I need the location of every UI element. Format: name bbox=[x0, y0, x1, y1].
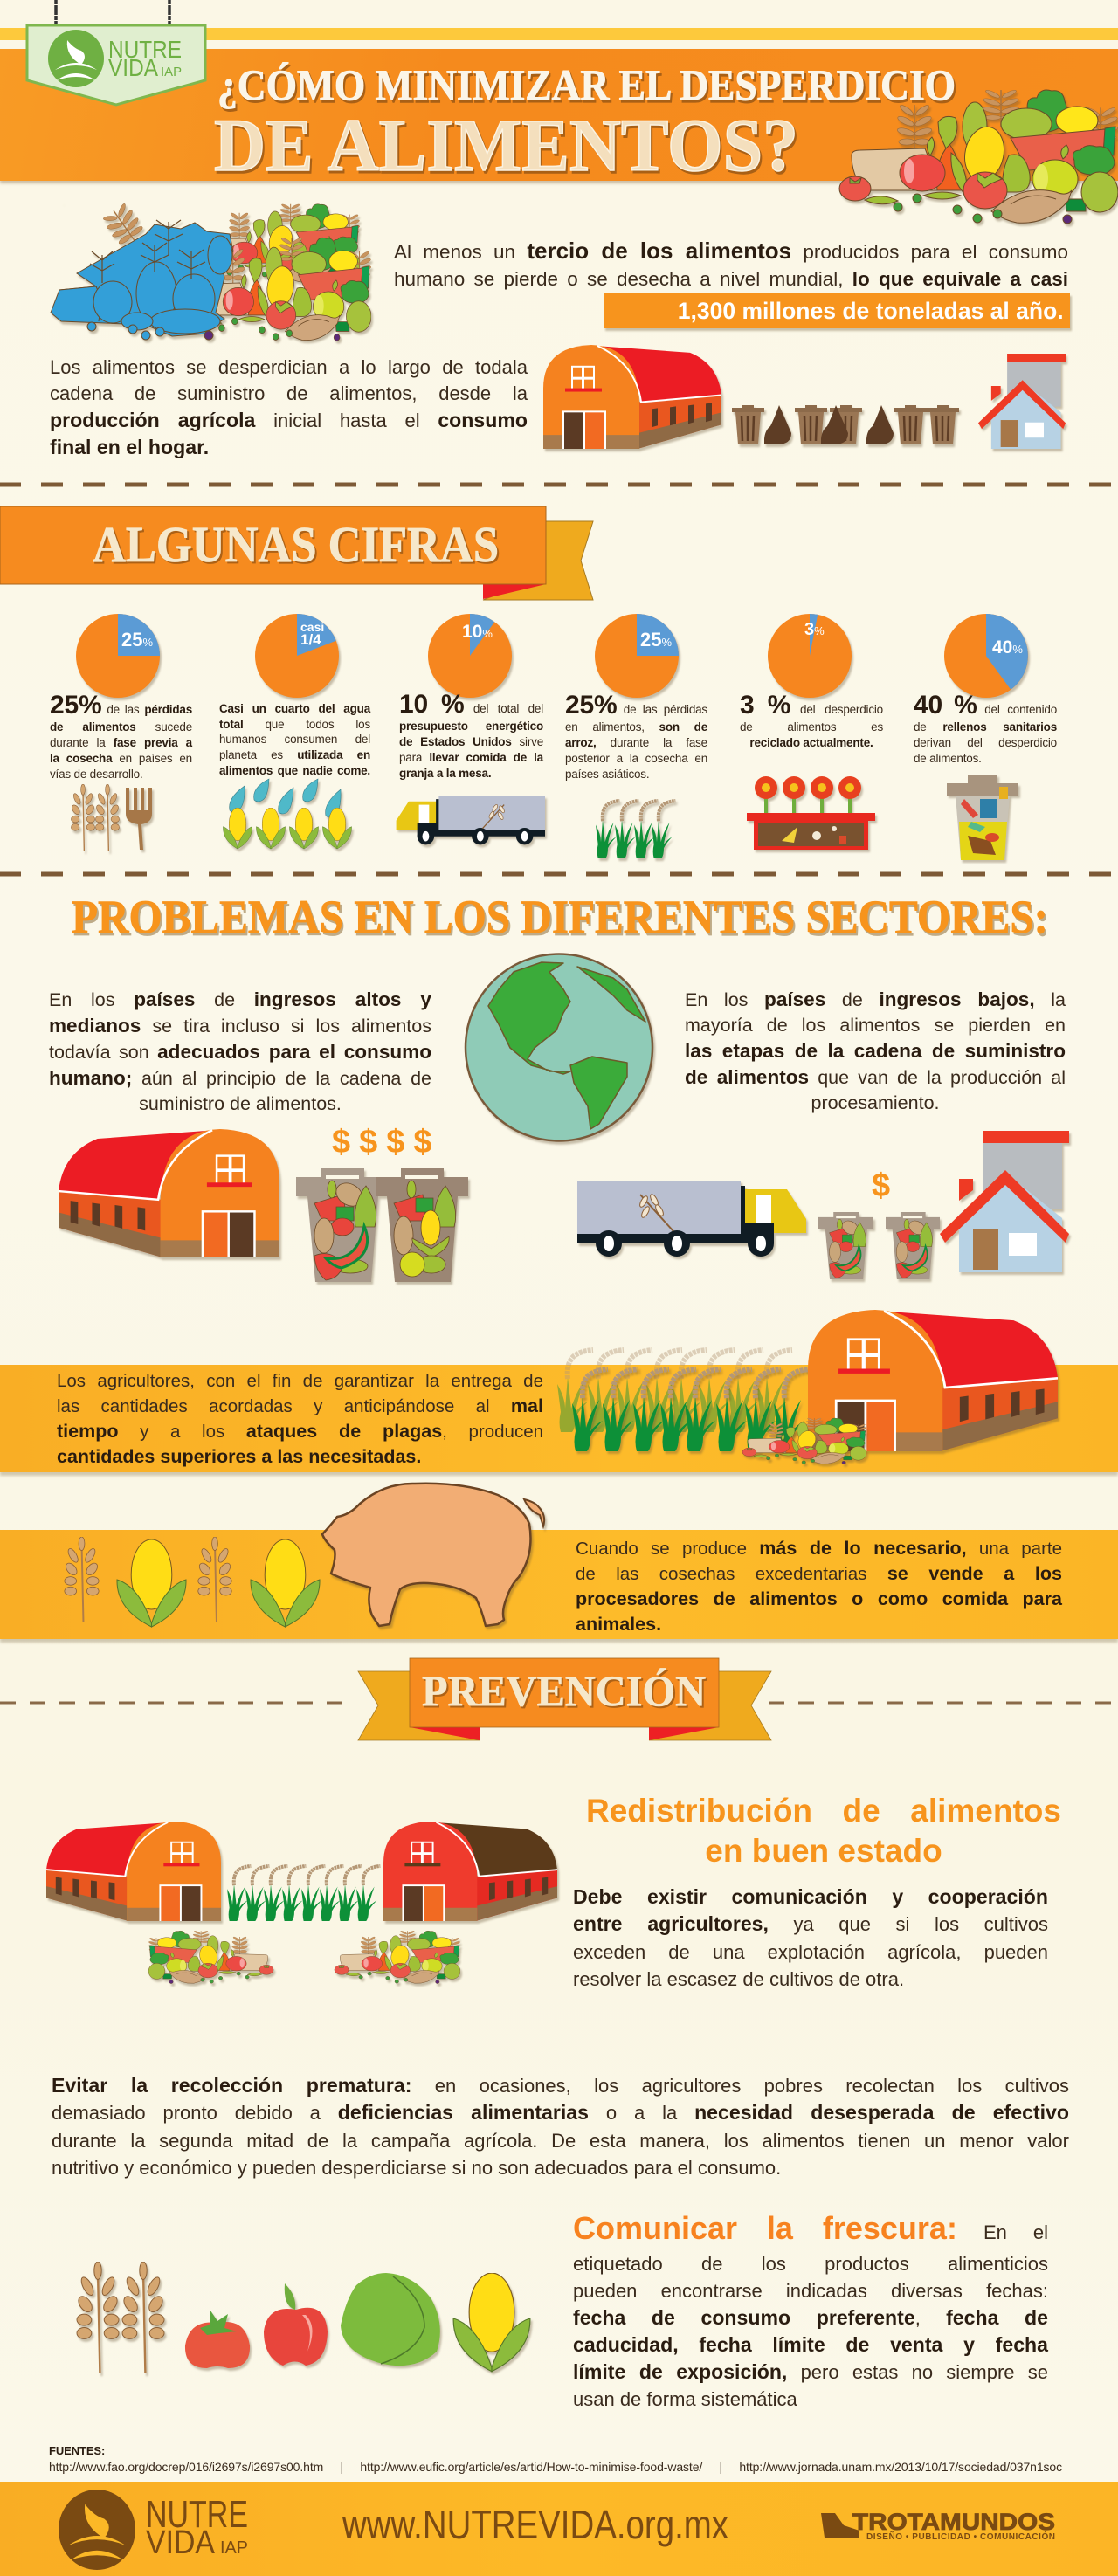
pie chart: 10% bbox=[428, 614, 514, 702]
text: a quarter of the water bbox=[219, 702, 370, 777]
icon: wheat and fork bbox=[71, 784, 155, 854]
text: high income countries: todavía son adecuados para el consumo bbox=[49, 1041, 431, 1063]
trotamundos logo: DISEÑO • PUBLICIDAD • COMUNICACIÓN bbox=[866, 2531, 1055, 2542]
band: farmers bbox=[0, 1365, 1118, 1472]
text: low income countries: procesamiento. bbox=[811, 1092, 940, 1113]
text: a quarter of the water: Casi un cuarto del agua bbox=[219, 702, 370, 715]
icon: small food pile bbox=[742, 1417, 866, 1464]
text: farmers overproduce: Los agricultores, con el fin de garantizar la entrega de bbox=[57, 1371, 543, 1391]
pie chart: 25%: 25% bbox=[121, 629, 153, 651]
text: 40% landfill: de rellenos sanitarios bbox=[914, 720, 1057, 734]
icon: dollar sign: $ bbox=[872, 1167, 890, 1204]
text: 25% rice: 25% de las pérdidas bbox=[565, 691, 707, 720]
icon: corn bbox=[452, 2273, 531, 2373]
text: low income countries: de alimentos que van de la producción al bbox=[685, 1066, 1066, 1088]
footer logo: NUTRE bbox=[146, 2493, 248, 2536]
text: a quarter of the water: alimentos que nadie come. bbox=[219, 764, 370, 777]
text: low income countries bbox=[685, 988, 1066, 1113]
text: 25% of losses: durante la fase previa a bbox=[50, 736, 192, 749]
text: 3% recycled: reciclado actualmente. bbox=[749, 736, 873, 749]
text: high income countries bbox=[49, 988, 431, 1114]
ribbon heading: Prevención bbox=[354, 1655, 777, 1746]
icon: orange barn bbox=[46, 1822, 221, 1921]
pie chart: almost 1/4 bbox=[255, 614, 342, 702]
text: 10% energy: de Estados Unidos sirve bbox=[399, 735, 543, 748]
text: farmers overproduce: cantidades superiores a las necesitadas. bbox=[57, 1446, 421, 1467]
pie chart: 10%: 10% bbox=[462, 622, 493, 642]
text: 40% landfill: derivan del desperdicio bbox=[914, 736, 1057, 749]
pie chart: 3%: 3% bbox=[804, 620, 825, 639]
title: DE ALIMENTOS? bbox=[214, 103, 798, 187]
text: supply chain bbox=[50, 356, 528, 458]
stat card: recycled bbox=[740, 614, 883, 854]
text: surplus sold: Cuando se produce más de lo necesario, una parte bbox=[576, 1538, 1062, 1559]
icon: red barn bbox=[383, 1822, 557, 1921]
stat card: water bbox=[219, 614, 370, 852]
icon: dollar signs: $$$$ bbox=[332, 1124, 441, 1161]
illustration: food pile, header right bbox=[838, 89, 1118, 227]
icon: pig bbox=[319, 1480, 550, 1629]
callout: 1,300 million tons bbox=[604, 293, 1070, 328]
text: farmers overproduce: las cantidades acordadas y anticipándose al mal bbox=[57, 1395, 543, 1416]
text: one third of food lost bbox=[394, 238, 1068, 290]
text: communicate freshness: límite de exposición, pero estas no siempre se bbox=[573, 2360, 1048, 2383]
text: 10% energy: 10 % del total del bbox=[399, 690, 543, 719]
text: low income countries: las etapas de la cadena de suministro bbox=[685, 1040, 1066, 1062]
text: communication: exceden de una explotación agrícola, pueden bbox=[573, 1941, 1048, 1963]
text: 25% of losses: de alimentos sucede bbox=[50, 720, 192, 734]
text: 25% of losses: la cosecha en países en bbox=[50, 752, 192, 765]
icon: globe bbox=[465, 953, 657, 1146]
title: ¿CÓMO MINIMIZAR EL DESPERDICIO bbox=[217, 60, 956, 109]
text: 3% recycled: 3 % del desperdicio bbox=[740, 691, 883, 720]
icon: house, low income bbox=[940, 1131, 1069, 1272]
text: 25% rice: arroz, durante la fase bbox=[565, 736, 707, 749]
text: 25% of losses: 25% de las pérdidas bbox=[50, 691, 192, 720]
text: supply chain: producción agrícola inicial hasta el consumo bbox=[50, 409, 528, 431]
pie chart: 25%: 25% bbox=[640, 629, 672, 651]
text: communication: Debe existir comunicación y cooperación bbox=[573, 1885, 1048, 1908]
text: 25% rice: países asiáticos. bbox=[565, 768, 649, 781]
hanging logo tag: NUTRE bbox=[108, 36, 182, 63]
text: 25% rice: en alimentos, son de bbox=[565, 720, 707, 734]
text: communicate freshness: usan de forma sistemática bbox=[573, 2388, 797, 2410]
icon: food bins, high income bbox=[296, 1168, 468, 1282]
text: 25% rice bbox=[565, 691, 707, 781]
sources: FUENTES: bbox=[49, 2444, 105, 2457]
text: 10% energy: granja a la mesa. bbox=[399, 767, 491, 780]
text: a quarter of the water: total que todos los bbox=[219, 718, 370, 731]
text: 10% energy: para llevar comida de la bbox=[399, 751, 543, 764]
band: animal feed bbox=[0, 1530, 1118, 1639]
text: supply chain: cadena de suministro de alimentos, desde la bbox=[50, 382, 528, 404]
icon: rice between barns bbox=[225, 1864, 384, 1921]
icon: truck bbox=[397, 796, 549, 849]
text: communication bbox=[573, 1884, 1048, 1993]
pie chart: 40%: 40% bbox=[992, 637, 1023, 658]
text: premature harvest: demasiado pronto debido a deficiencias alimentarias o a la necesidad desesperada de efectivo bbox=[52, 2101, 1069, 2124]
footer logo: IAP bbox=[220, 2538, 248, 2558]
text: a quarter of the water: humanos consumen del bbox=[219, 733, 370, 746]
icon: trash bins and bags row bbox=[732, 405, 962, 448]
icon: food bins, low income bbox=[818, 1212, 940, 1279]
text: communication: resolver la escasez de cultivos de otra. bbox=[573, 1968, 904, 1990]
ribbon heading: Prevención: PREVENCIÓN bbox=[422, 1666, 706, 1715]
text: surplus sold: de las cosechas excedentarias se vende a los bbox=[576, 1563, 1062, 1584]
heading: redistribution: en buen estado bbox=[705, 1833, 942, 1869]
text: high income countries: suministro de alimentos. bbox=[139, 1093, 342, 1114]
pie chart: 3% bbox=[768, 614, 854, 702]
text: farmers overproduce: tiempo y a los ataques de plagas, producen bbox=[57, 1421, 543, 1442]
text: communicate freshness: fecha de consumo preferente, fecha de bbox=[573, 2306, 1048, 2329]
text: high income countries: En los países de ingresos altos y bbox=[49, 988, 431, 1010]
header yellow stripe bbox=[0, 28, 1118, 40]
hanging logo tag bbox=[26, 0, 206, 107]
text: one third of food lost: Al menos un tercio de los alimentos producidos para el consumo bbox=[394, 238, 1068, 264]
title bbox=[214, 60, 956, 187]
text: premature harvest: durante la segunda mitad de la campaña agrícola. De esta manera, los alimentos tienen un menor valor bbox=[52, 2130, 1069, 2152]
text: communicate freshness: etiquetado de los productos alimenticios bbox=[573, 2253, 1048, 2275]
icon: water drops over corn bbox=[223, 779, 355, 852]
footer logo bbox=[59, 2489, 251, 2572]
icon: wheat and corn row bbox=[60, 1537, 321, 1629]
text: 40% landfill bbox=[914, 691, 1057, 765]
text: supply chain: final en el hogar. bbox=[50, 436, 209, 458]
footer logo: VIDA bbox=[146, 2524, 216, 2561]
text: 10% energy bbox=[399, 690, 543, 780]
text: supply chain: Los alimentos se desperdician a lo largo de todala bbox=[50, 356, 528, 378]
text: premature harvest: Evitar la recolección prematura: en ocasiones, los agricultores pobres recolectan los cultivos bbox=[52, 2074, 1069, 2097]
sources bbox=[49, 2443, 1062, 2475]
trotamundos logo bbox=[818, 2511, 1059, 2543]
dashed divider bbox=[0, 482, 1111, 487]
text: 25% of losses: vías de desarrollo. bbox=[50, 768, 143, 781]
icon: barn, farmers band bbox=[808, 1310, 1058, 1451]
pie chart: 25% bbox=[76, 614, 162, 702]
text: one third of food lost: humano se pierde o se desecha a nivel mundial, lo que equivale a casi bbox=[394, 268, 1068, 290]
text: communication: entre agricultores, ya que si los cultivos bbox=[573, 1912, 1048, 1935]
website url: www.NUTREVIDA.org.mx bbox=[342, 2502, 728, 2547]
icon: house bbox=[978, 354, 1068, 452]
icon: rice plants bbox=[596, 799, 678, 863]
text: communicate freshness bbox=[573, 2215, 1048, 2413]
text: 10% energy: presupuesto energético bbox=[399, 720, 543, 733]
text: low income countries: En los países de ingresos bajos, la bbox=[685, 988, 1066, 1010]
pie chart: almost 1/4: 1/4 bbox=[300, 631, 321, 648]
text: communicate freshness: Comunicar la frescura: En el bbox=[573, 2210, 1048, 2246]
hanging logo tag: VIDA bbox=[108, 54, 158, 81]
icon: barn, high income bbox=[59, 1129, 280, 1257]
footer band bbox=[0, 2482, 1118, 2576]
icon: cabbage bbox=[341, 2273, 442, 2366]
heading: redistribution: Redistribución de alimentos bbox=[586, 1793, 1061, 1829]
text: 25% rice: posterior a la cosecha en bbox=[565, 752, 707, 765]
icon: rice field bbox=[556, 1347, 810, 1452]
trotamundos logo: TROTAMUNDOS bbox=[852, 2509, 1055, 2535]
text: communicate freshness: caducidad, fecha límite de venta y fecha bbox=[573, 2333, 1048, 2356]
text: farmers overproduce bbox=[57, 1368, 543, 1470]
callout: 1,300 million tons: 1,300 millones de toneladas al año. bbox=[678, 298, 1064, 324]
ribbon heading: Algunas cifras bbox=[0, 506, 594, 601]
section heading: problems in different sectors: PROBLEMAS EN LOS DIFERENTES SECTORES: bbox=[72, 891, 1048, 943]
sources: http://www.fao.org/docrep/016/i2697s/i2697s00.htm | http://www.eufic.org/article/es/artid/How-to-minimise-food-waste/ | http://www.jornada.unam.mx/2013/10/17/sociedad/037n1soc bbox=[49, 2460, 1062, 2474]
icon: wheat pair bbox=[72, 2262, 171, 2373]
icon: full landfill bin bbox=[947, 775, 1022, 864]
pie chart: 25% bbox=[595, 614, 681, 702]
icon: tomato bbox=[184, 2311, 251, 2371]
illustration: half blue food pile bbox=[50, 203, 374, 344]
icon: food pile right bbox=[334, 1930, 460, 1984]
pie chart: 40% bbox=[944, 614, 1031, 702]
text: 25% of losses bbox=[50, 691, 192, 781]
text: 40% landfill: 40 % del contenido bbox=[914, 691, 1057, 720]
text: surplus sold: procesadores de alimentos o como comida para bbox=[576, 1588, 1062, 1609]
stat card: landfill bbox=[914, 614, 1057, 864]
text: a quarter of the water: planeta es utilizada en bbox=[219, 748, 370, 761]
text: 3% recycled: de alimentos es bbox=[740, 720, 883, 734]
text: surplus sold bbox=[576, 1536, 1062, 1637]
dashed divider bbox=[0, 871, 1111, 877]
text: low income countries: mayoría de los alimentos se pierden en bbox=[685, 1015, 1066, 1036]
text: 40% landfill: de alimentos. bbox=[914, 752, 982, 765]
icon: apple bbox=[264, 2283, 328, 2366]
icon: barn bbox=[543, 345, 724, 452]
text: high income countries: humano; aún al principio de la cadena de bbox=[49, 1067, 431, 1089]
text: premature harvest: nutritivo y económico y pueden desperdiciarse si no son adecuados para el consumo. bbox=[52, 2157, 781, 2179]
stat card: energy budget bbox=[397, 614, 549, 849]
text: high income countries: medianos se tira incluso si los alimentos bbox=[49, 1015, 431, 1037]
stat card: 25% harvest bbox=[50, 614, 192, 854]
icon: flower planter bbox=[747, 776, 879, 854]
icon: truck, low income bbox=[577, 1179, 810, 1257]
text: premature harvest bbox=[52, 2072, 1069, 2181]
text: surplus sold: animales. bbox=[576, 1614, 661, 1635]
dashed divider with ribbon gap bbox=[0, 1701, 1118, 1705]
stat card: rice bbox=[565, 614, 707, 863]
header orange banner bbox=[0, 49, 1118, 181]
icon: food pile left bbox=[148, 1930, 274, 1984]
text: communicate freshness: pueden encontrarse indicadas diversas fechas: bbox=[573, 2280, 1048, 2302]
pie chart: almost 1/4: casi bbox=[300, 620, 324, 634]
heading: redistribution bbox=[586, 1791, 1061, 1871]
text: 3% recycled bbox=[740, 691, 883, 749]
ribbon heading: Algunas cifras: ALGUNAS CIFRAS bbox=[93, 516, 499, 573]
hanging logo tag: IAP bbox=[161, 65, 182, 79]
